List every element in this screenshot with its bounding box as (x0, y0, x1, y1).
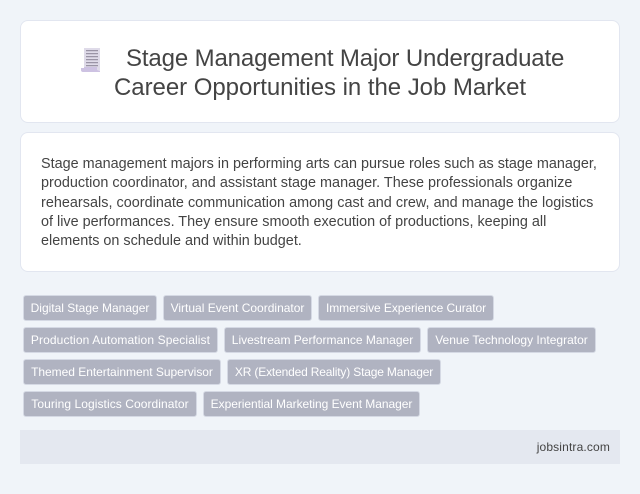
description text: Stage management majors in performing arts can pursue roles such as stage manager, (41, 156, 597, 172)
footer bar (20, 430, 620, 464)
tag (23, 295, 157, 321)
tag (427, 327, 596, 353)
title line 2: Career Opportunities in the Job Market (114, 74, 526, 101)
tag: Digital Stage Manager (31, 301, 149, 315)
tag (318, 295, 494, 321)
tag: Livestream Performance Manager (232, 333, 413, 347)
description text: production coordinator, and assistant stage manager. These professionals organize (41, 175, 572, 191)
icon: document scroll (81, 48, 100, 72)
description text: elements on schedule and within budget. (41, 233, 302, 249)
tag group: career roles (23, 295, 596, 417)
description text: of live performances. They ensure smooth execution of productions, keeping all (41, 214, 546, 230)
title line 1: Stage Management Major Undergraduate (126, 45, 564, 72)
tag (163, 295, 312, 321)
tag: XR (Extended Reality) Stage Manager (235, 365, 433, 379)
panel: title card (20, 20, 620, 123)
description text: rehearsals, coordinate communication among cast and crew, and manage the logistics (41, 195, 593, 211)
footer source text: jobsintra.com (537, 440, 610, 454)
tag: Venue Technology Integrator (435, 333, 588, 347)
tag (23, 359, 221, 385)
tag (23, 327, 218, 353)
tag: Production Automation Specialist (31, 333, 210, 347)
description text (41, 156, 597, 249)
tag (227, 359, 441, 385)
tag (203, 391, 420, 417)
tag: Immersive Experience Curator (326, 301, 486, 315)
tag (224, 327, 421, 353)
tag: Themed Entertainment Supervisor (31, 365, 213, 379)
tag: Virtual Event Coordinator (171, 301, 304, 315)
tag: Touring Logistics Coordinator (31, 397, 189, 411)
tag: Experiential Marketing Event Manager (211, 397, 412, 411)
panel: description card (20, 132, 620, 272)
tag (23, 391, 197, 417)
